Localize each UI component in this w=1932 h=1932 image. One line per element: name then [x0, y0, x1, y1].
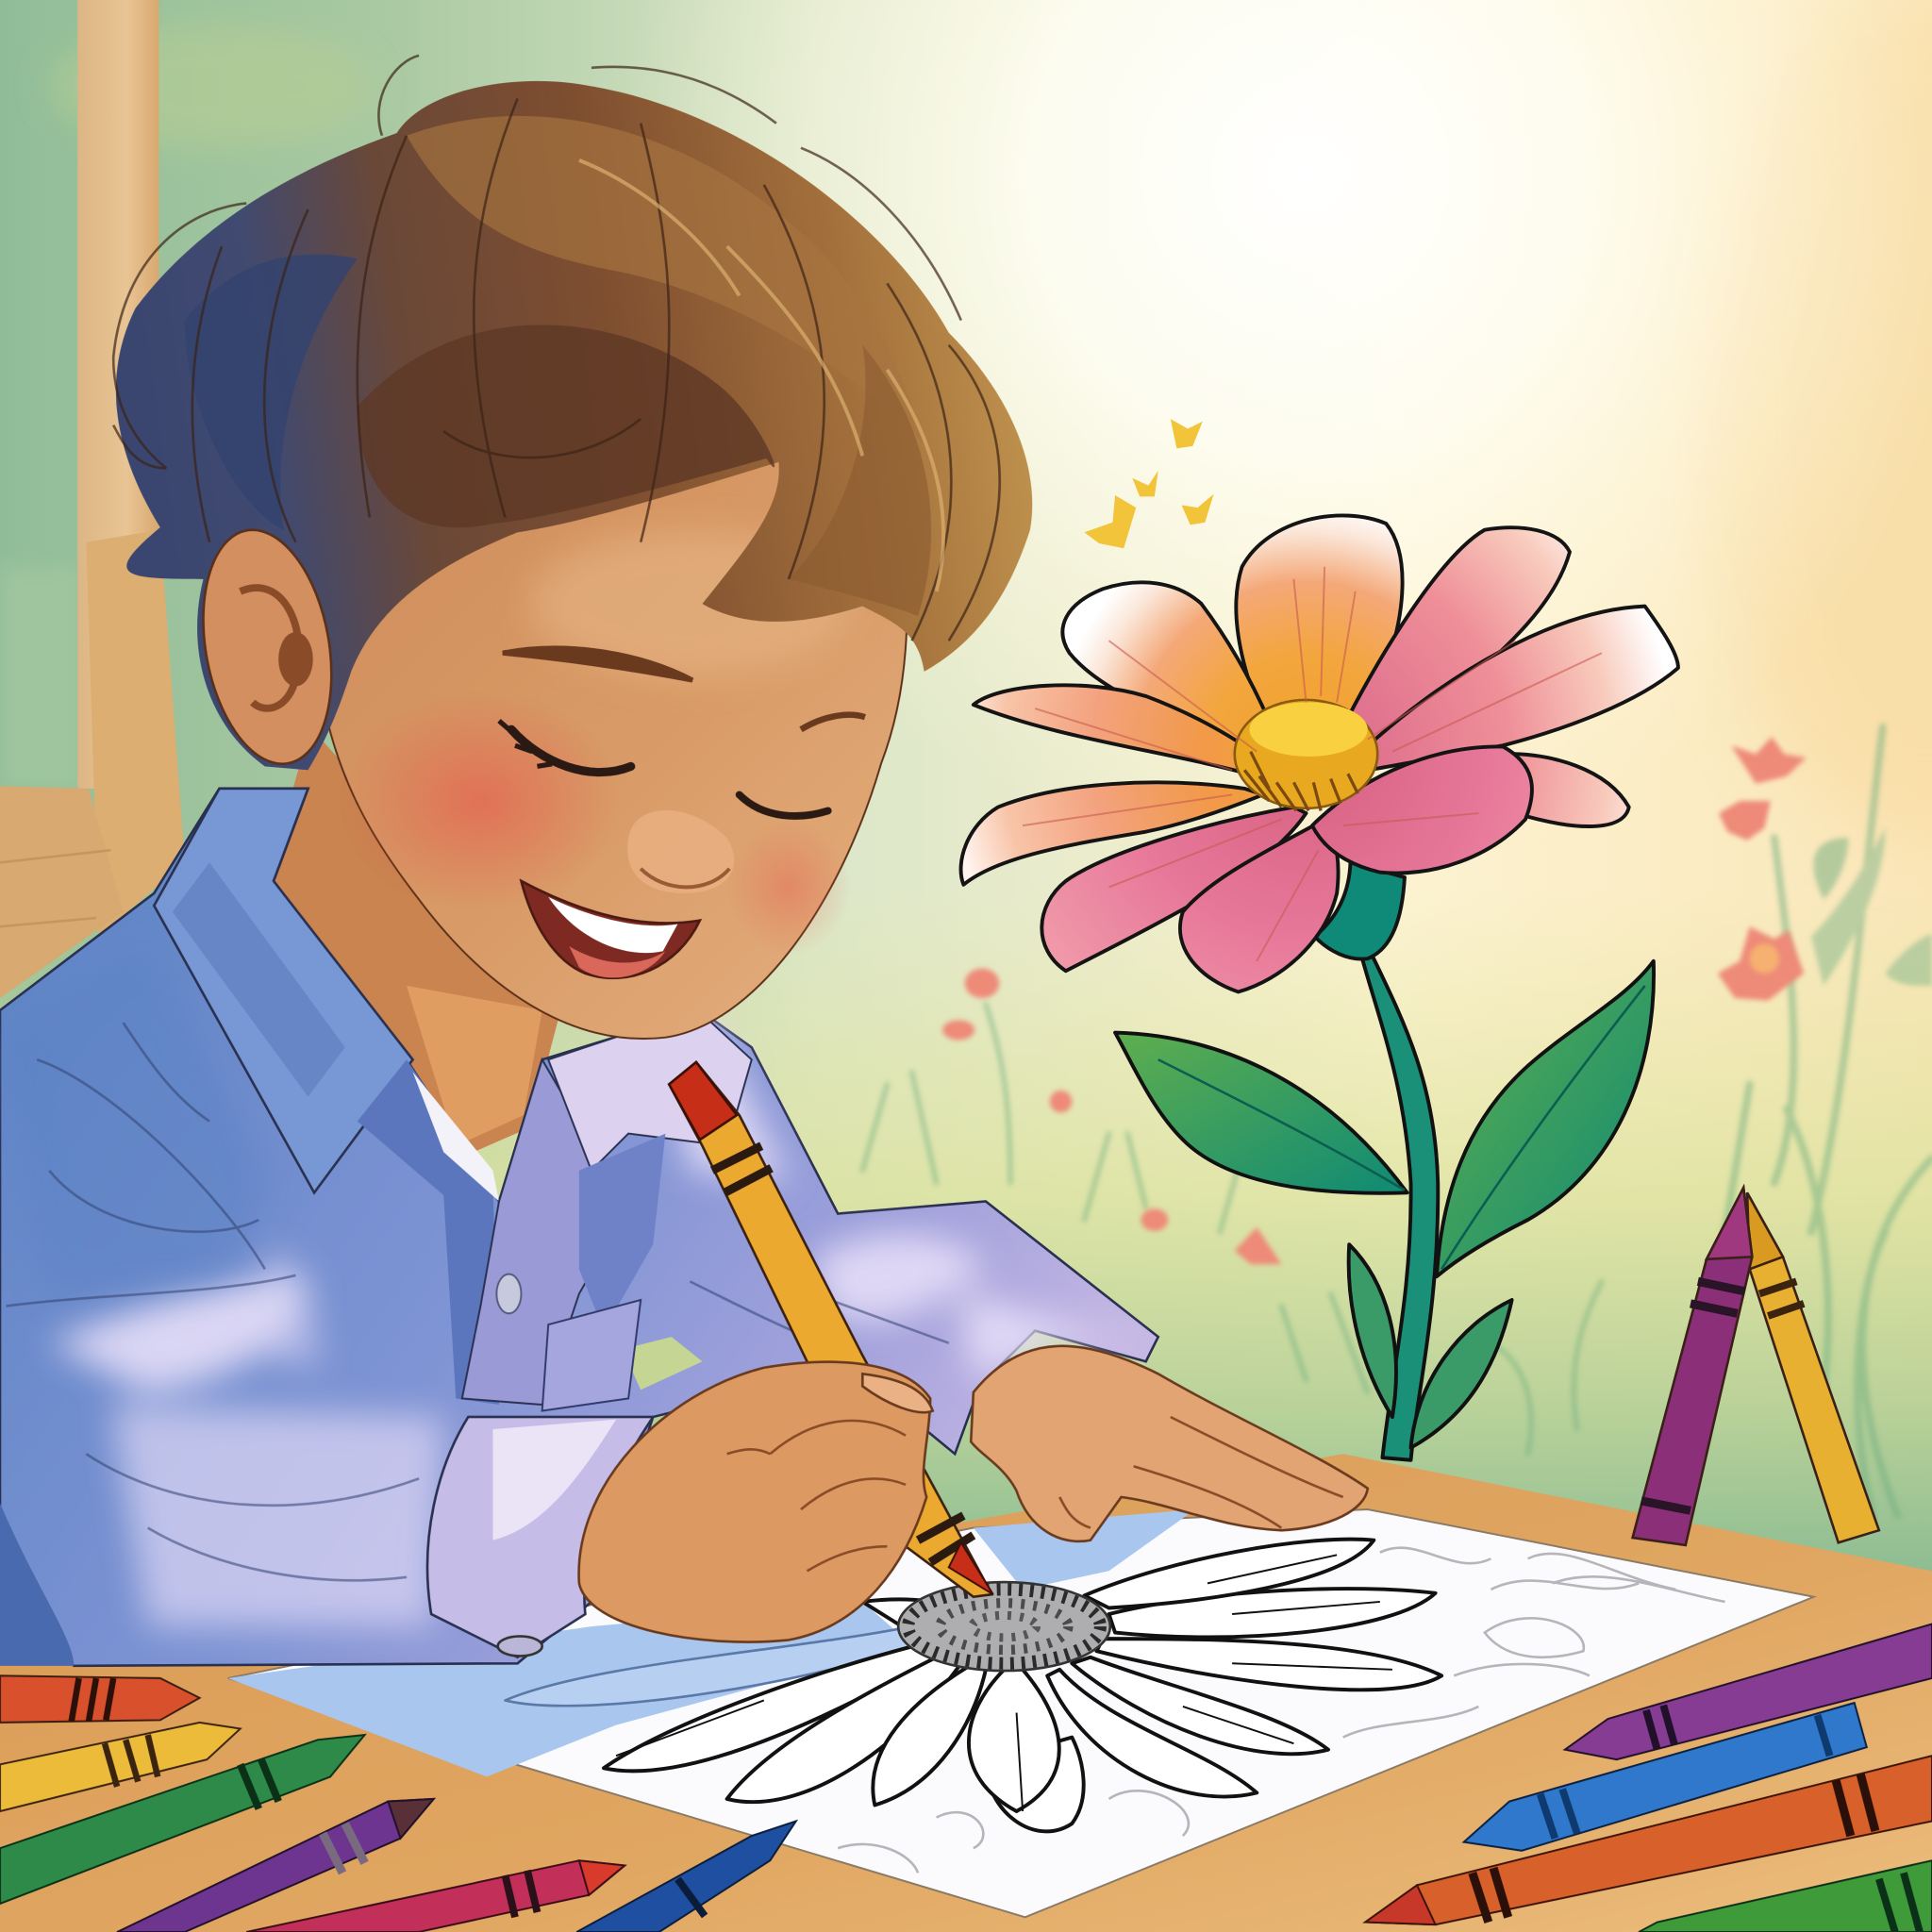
petal upper right — [1337, 527, 1570, 764]
petal upper left — [1062, 582, 1281, 770]
right leaf — [1437, 961, 1654, 1276]
wooden post and window frame — [0, 0, 185, 998]
neck — [265, 727, 560, 1171]
standing crayons — [1633, 1188, 1879, 1545]
collar right — [548, 986, 752, 1171]
mouth — [521, 881, 700, 978]
butterflies — [1084, 419, 1214, 548]
left leaf — [1115, 1033, 1407, 1193]
nose — [627, 810, 734, 893]
collar left — [154, 789, 413, 1192]
shirt cuff — [427, 1417, 653, 1657]
loose crayon: green — [0, 1735, 365, 1904]
head — [311, 443, 907, 1039]
boy — [0, 56, 1158, 1666]
loose crayon: right orange — [1365, 1756, 1932, 1924]
loose crayon: right blue — [1464, 1703, 1867, 1851]
petal lower left — [1041, 808, 1306, 971]
petal lower right — [1312, 746, 1532, 873]
pocket — [542, 1300, 641, 1411]
petal right — [1361, 607, 1678, 770]
fold lines — [7, 1023, 949, 1580]
yellow standing crayon — [1747, 1192, 1879, 1542]
large flower stem and leaves — [1115, 951, 1654, 1460]
paper doodles — [838, 1548, 1725, 1873]
flower centre — [1235, 700, 1377, 810]
blue coloured area — [228, 1602, 912, 1776]
background small flowers — [942, 737, 1807, 1264]
gap showing background — [623, 1337, 702, 1390]
purple standing crayon — [1633, 1188, 1752, 1545]
back petal lower right — [1497, 754, 1629, 826]
eyebrows — [503, 648, 692, 680]
loose crayon: red — [0, 1675, 200, 1723]
sepal — [1315, 862, 1405, 959]
held crayon — [669, 1062, 993, 1597]
drawing hand — [579, 1362, 933, 1642]
loose crayon: dark blue — [576, 1821, 796, 1932]
grass and background plants — [862, 727, 1932, 1516]
ear — [186, 520, 349, 774]
loose crayon: purple — [117, 1799, 434, 1932]
hair strands — [113, 56, 1000, 641]
large flower head — [961, 515, 1678, 991]
loose crayon: right green — [1639, 1860, 1932, 1932]
face — [311, 443, 907, 1039]
daisy centre — [898, 1582, 1110, 1671]
loose crayon: crimson — [246, 1860, 625, 1932]
cheek blush — [339, 690, 623, 912]
left eye lashes — [511, 729, 631, 773]
petal bottom — [1180, 820, 1339, 991]
right eye lashes — [740, 794, 828, 816]
shirt highlights — [49, 1010, 1134, 1626]
forehead light — [530, 530, 850, 677]
inner shirt and placket — [358, 1059, 499, 1405]
petal left long — [961, 782, 1263, 885]
resting hand — [971, 1346, 1368, 1541]
shirt button — [496, 1274, 521, 1313]
outline daisy on paper — [506, 1540, 1441, 1831]
shirt body and sleeves — [0, 789, 1158, 1666]
hair — [113, 56, 1032, 770]
lower right leaf — [1411, 1300, 1512, 1448]
loose crayon: right purple — [1565, 1624, 1932, 1759]
table — [0, 1454, 1932, 1932]
loose crayon: yellow — [0, 1723, 241, 1811]
stem — [1361, 951, 1438, 1460]
petal top — [1236, 515, 1403, 752]
petal left — [974, 685, 1269, 776]
lower left leaf — [1349, 1244, 1396, 1417]
colouring paper — [228, 1509, 1814, 1917]
